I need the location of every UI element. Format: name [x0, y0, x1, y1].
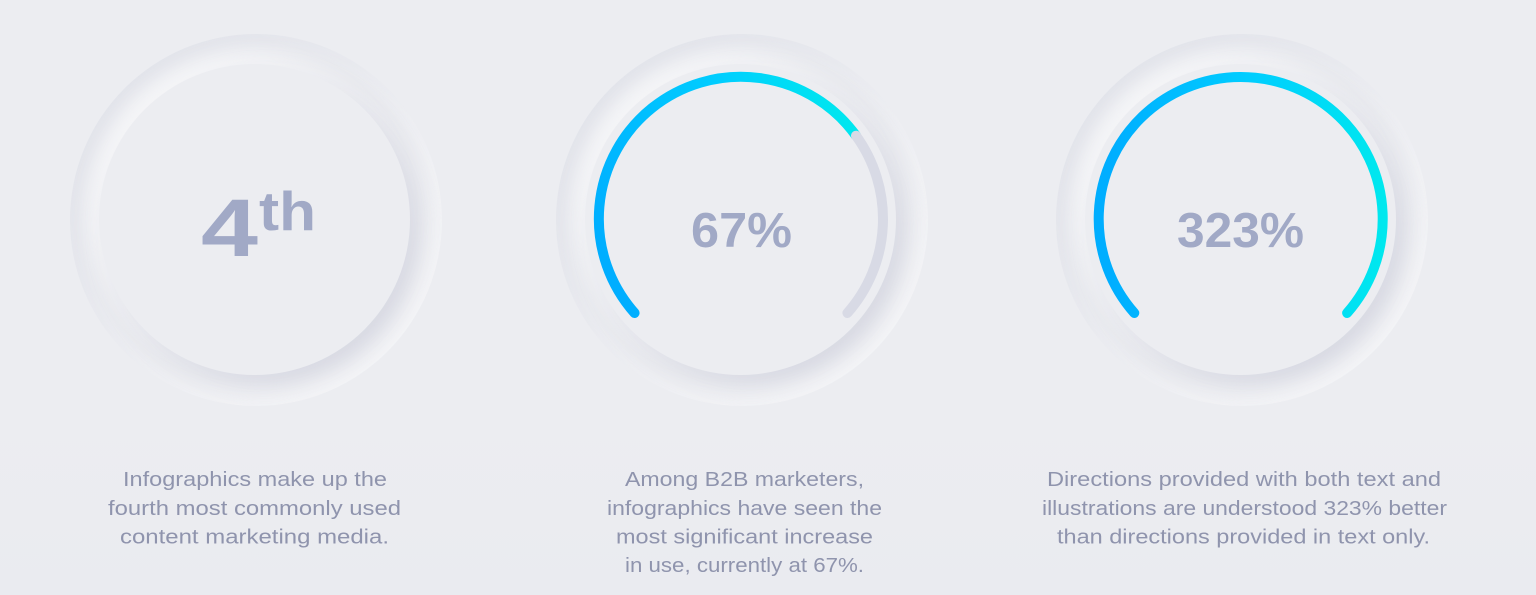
raised disc: 67% — [585, 64, 896, 375]
description: 67%: most significant increase — [616, 526, 873, 548]
description: 67%: infographics have seen the — [607, 497, 882, 520]
panel: 323% better understanding — [1042, 36, 1447, 548]
raised disc: 4th — [99, 64, 410, 375]
neumorphic ring: 4th — [70, 34, 442, 406]
gauge arc: full progress — [1099, 77, 1383, 313]
big number: 67%: 67% — [691, 204, 792, 258]
big number: 4th — [201, 180, 316, 274]
description: 4th: content marketing media. — [120, 526, 389, 548]
neumorphic ring: 67% — [556, 34, 928, 406]
chart text layer: 4th — [108, 180, 401, 548]
gauge arc: remaining track — [847, 136, 883, 313]
description: 323%: illustrations are understood 323% better — [1042, 497, 1447, 520]
description: 4th — [108, 468, 401, 548]
description: 4th: Infographics make up the — [123, 468, 387, 491]
raised disc: 323% — [1085, 64, 1396, 375]
chart layer: 67% — [594, 72, 888, 577]
panel: 67% B2B increase — [558, 36, 908, 577]
description: 323%: Directions provided with both text and — [1047, 468, 1441, 491]
neumorphic ring: 323% — [1056, 34, 1428, 406]
description: 4th: fourth most commonly used — [108, 497, 401, 520]
description: 67%: Among B2B marketers, — [625, 468, 864, 491]
description: 67%: in use, currently at 67%. — [625, 554, 864, 577]
big number: 323%: 323% — [1177, 204, 1304, 258]
description: 67% — [607, 468, 882, 577]
description: 323%: than directions provided in text only. — [1057, 526, 1430, 548]
chart layer: 323% — [1042, 72, 1447, 548]
big number: 4th: th — [259, 180, 316, 242]
description: 323% — [1042, 468, 1447, 548]
panel: 4th most used media — [72, 36, 422, 548]
gauge arc: 67% progress — [599, 77, 856, 313]
big number: 4th: 4 — [201, 183, 258, 274]
